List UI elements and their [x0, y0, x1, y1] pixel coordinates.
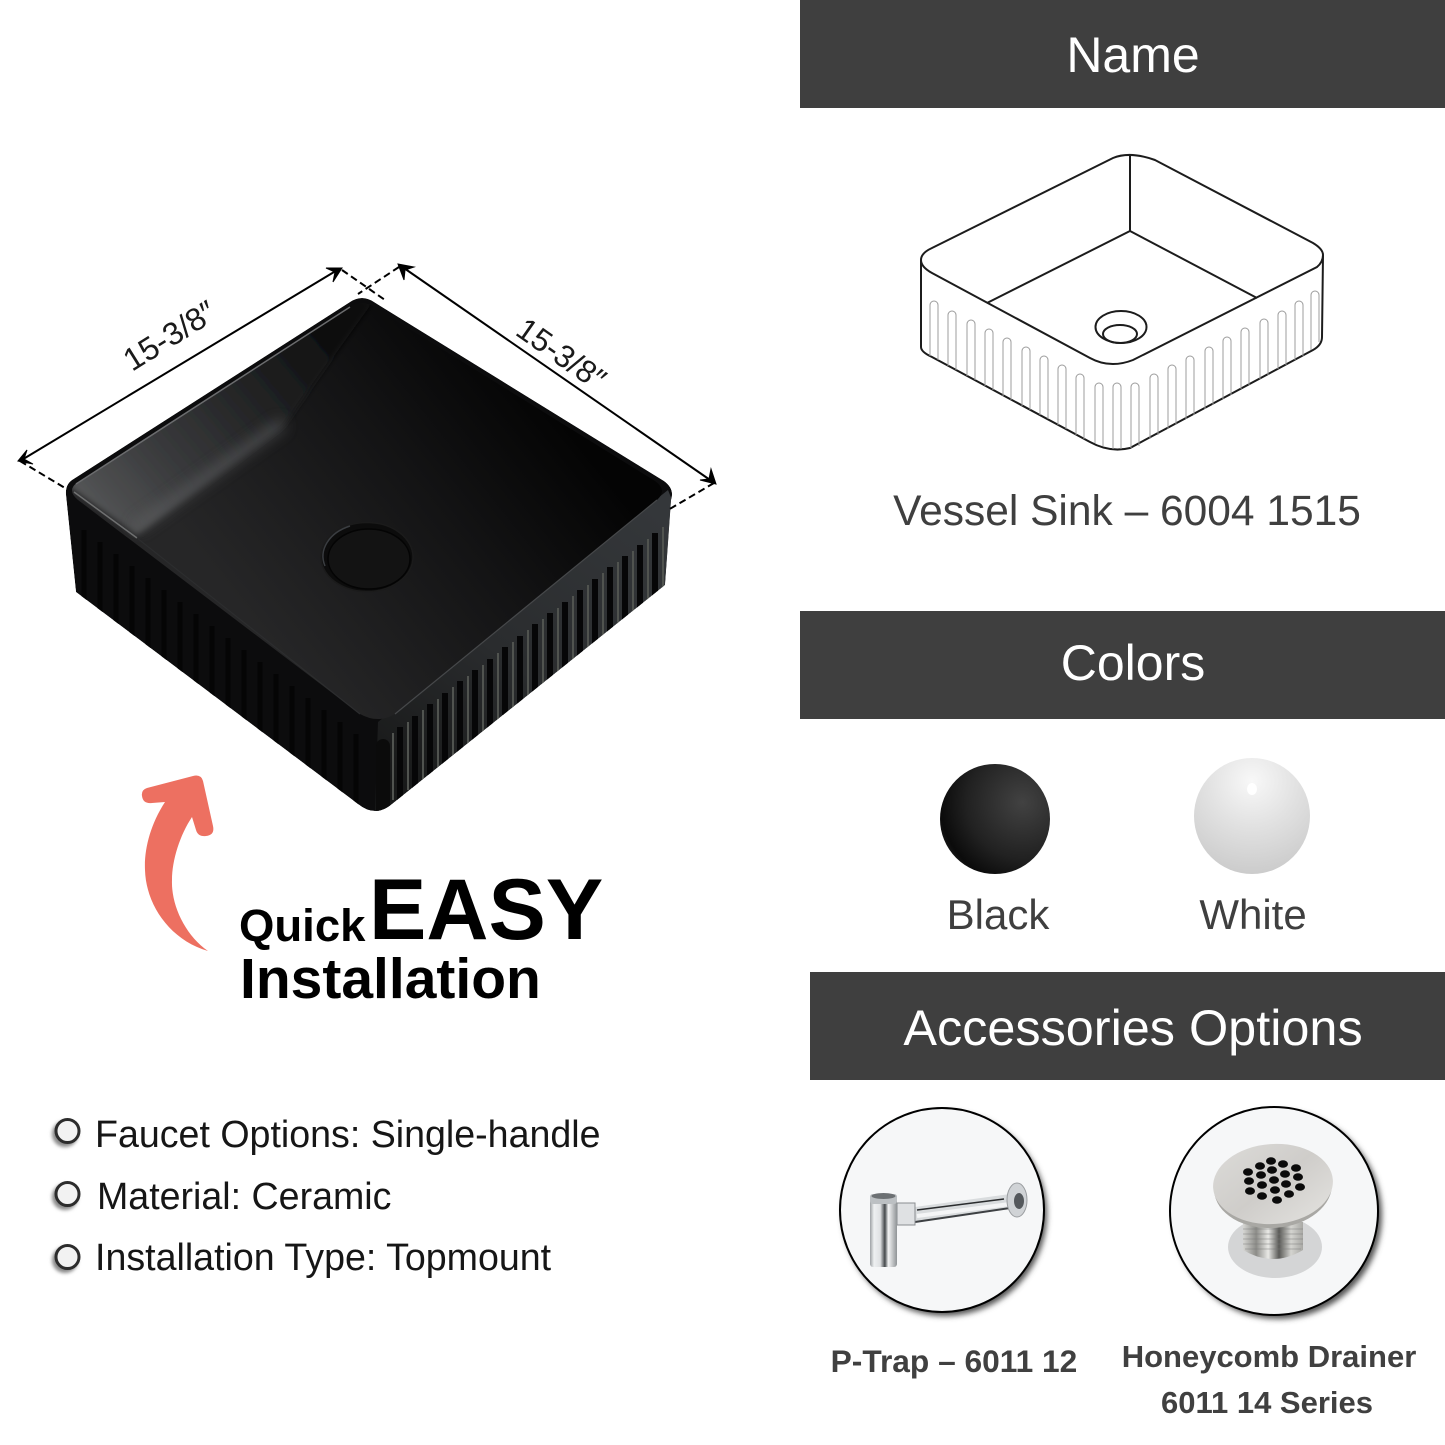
line drawing of sink: [921, 155, 1323, 450]
heading: Quick EASY Installation: EASY: [369, 862, 603, 958]
heading: Quick EASY Installation: [239, 862, 603, 1011]
panel: colors: [800, 611, 1445, 938]
feature: faucet options: Faucet Options: Single-handle: [95, 1113, 601, 1155]
accessory: p-trap image: [840, 1108, 1047, 1316]
label: honeycomb drainer: 6011 14 Series: [1161, 1385, 1373, 1420]
label: honeycomb drainer: Honeycomb Drainer: [1122, 1339, 1416, 1374]
dimension label right: 15-3/8″: [510, 310, 613, 397]
panel: accessories options: [810, 972, 1445, 1420]
heading: Quick EASY Installation: Installation: [240, 947, 541, 1011]
label: p-trap: P-Trap – 6011 12: [831, 1343, 1077, 1379]
feature: installation type: Installation Type: Topmount: [95, 1236, 552, 1278]
header bar: colors: [800, 611, 1445, 719]
swatch: black: [940, 764, 1050, 874]
product name text: Vessel Sink – 6004 1515: [893, 488, 1361, 535]
label: honeycomb drainer: [1122, 1339, 1416, 1420]
icon: curved coral arrow: [142, 776, 213, 951]
label: black: Black: [947, 891, 1050, 938]
accessory: honeycomb drainer image: [1170, 1107, 1382, 1319]
bullet 3: [52, 1246, 79, 1273]
header bar: name: Name: [1066, 27, 1200, 83]
sink drain: [321, 522, 413, 592]
header bar: accessories: [810, 972, 1445, 1080]
heading: Quick EASY Installation: Quick: [239, 900, 366, 951]
panel: product photo with dimensions: [18, 264, 716, 820]
bullet 2: [52, 1182, 79, 1210]
sink body side walls: [66, 298, 672, 820]
header bar: accessories: Accessories Options: [903, 999, 1363, 1056]
header bar: name: [800, 0, 1445, 108]
swatch: white: [1194, 758, 1310, 874]
panel: name: [800, 0, 1445, 535]
feature: material: Material: Ceramic: [97, 1175, 391, 1217]
bullet 1: [52, 1120, 79, 1147]
label: white: White: [1199, 891, 1307, 938]
dimension lines and arrows: [18, 264, 716, 510]
feature list: [52, 1113, 601, 1278]
sink bowl interior: [60, 295, 662, 719]
dimension label left: 15-3/8″: [117, 293, 222, 378]
header bar: colors: Colors: [1061, 635, 1205, 691]
